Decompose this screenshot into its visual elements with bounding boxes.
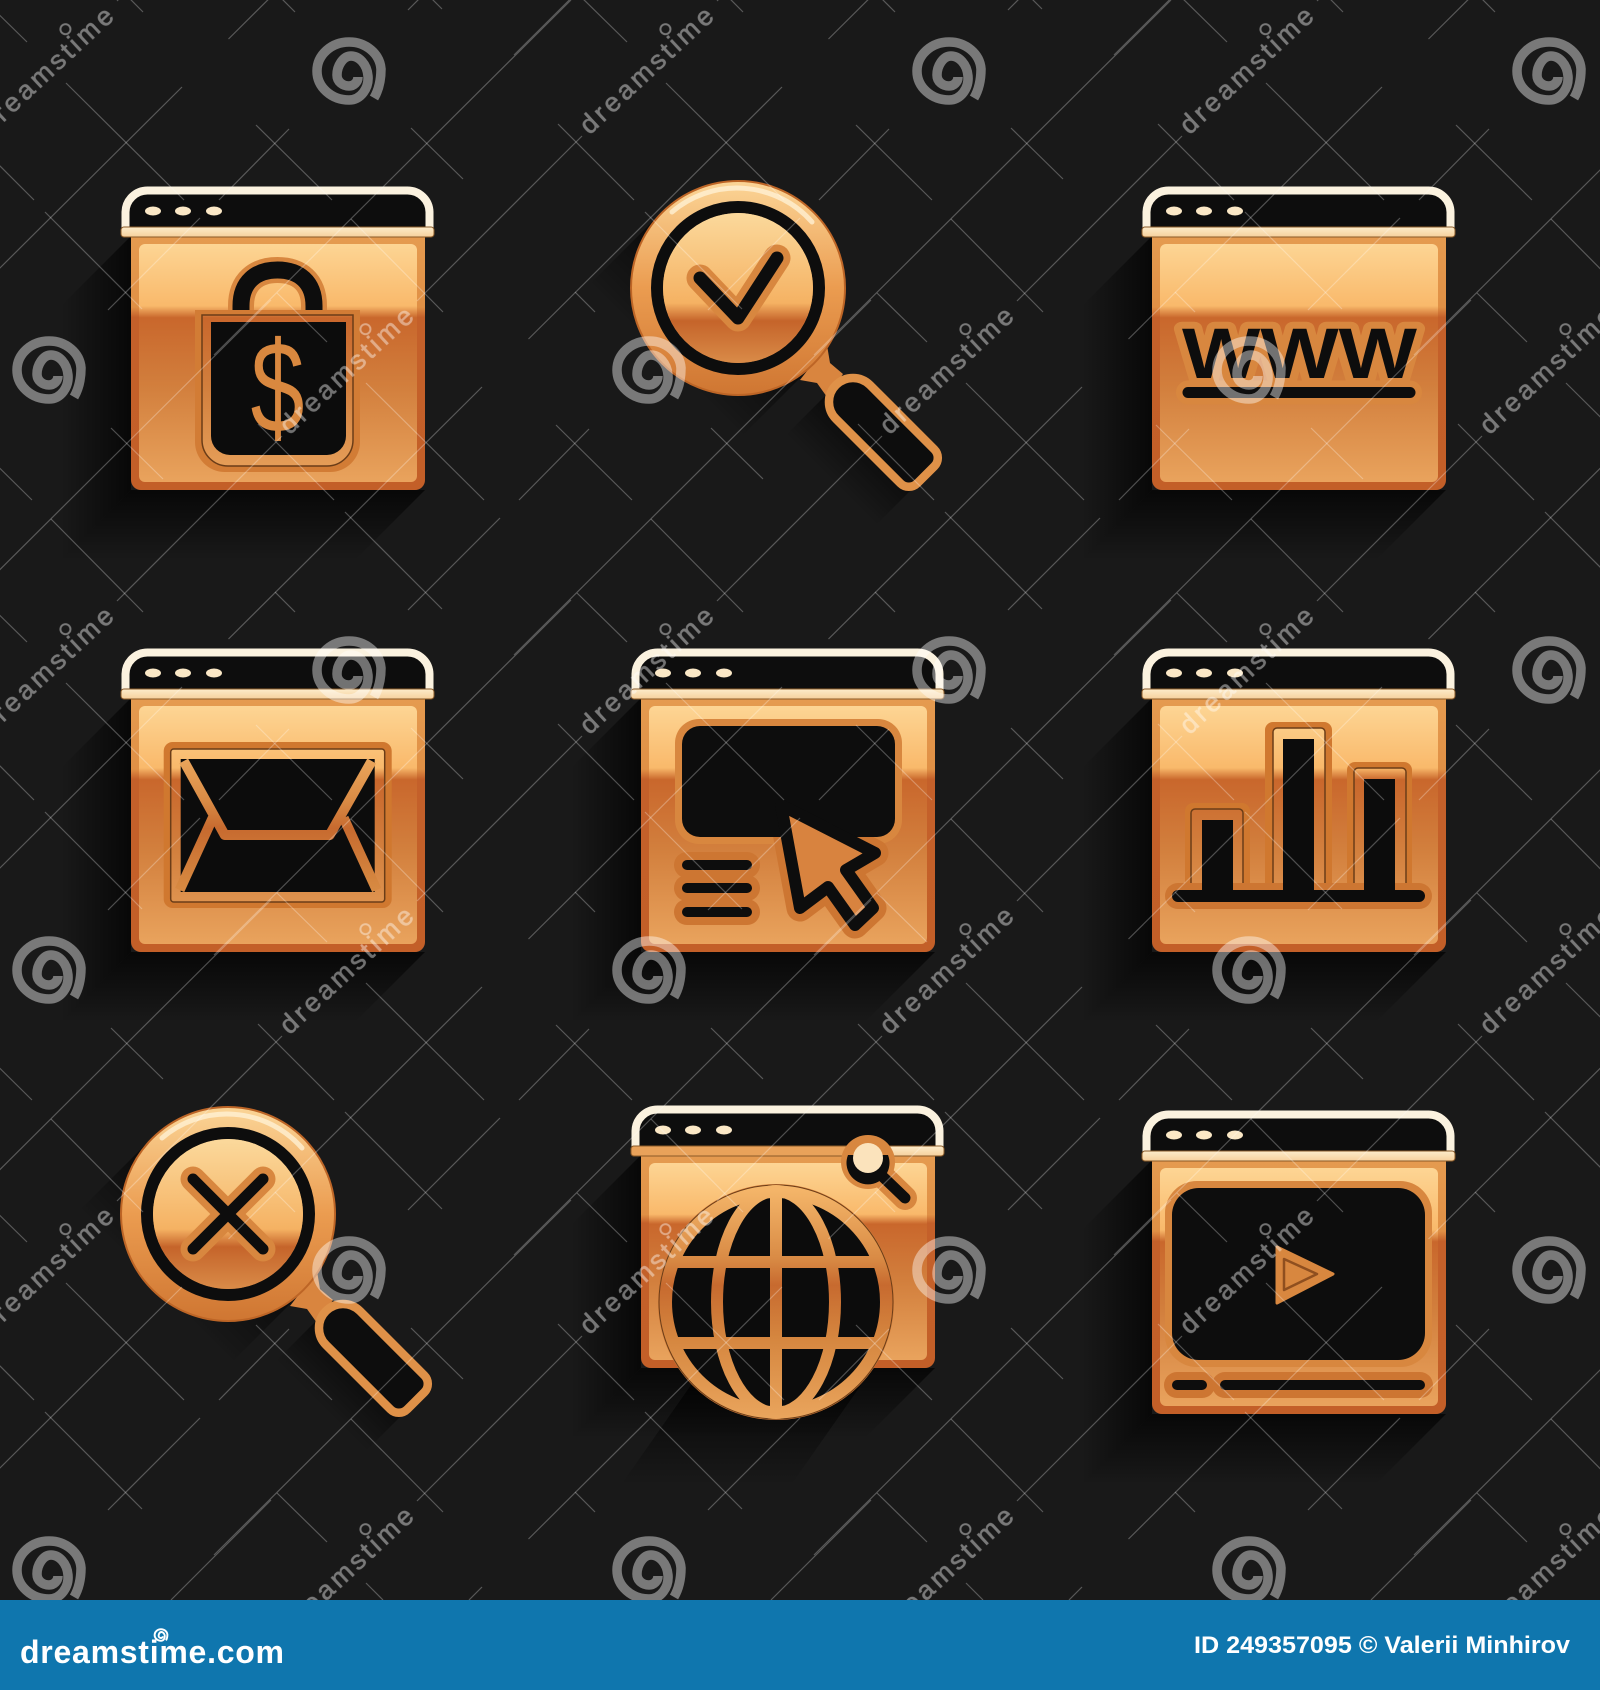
- check mark: [700, 258, 777, 318]
- watermark text: dreamstime: [873, 301, 1019, 440]
- icon: globe search window: [571, 1110, 944, 1485]
- icon: envelope window: [61, 652, 434, 1022]
- icon: bar chart window: [1082, 652, 1455, 1022]
- watermark text: dreamstime: [1173, 1, 1319, 140]
- window body: [641, 1155, 935, 1368]
- progress bars: [1177, 1372, 1420, 1398]
- text lines: [687, 865, 747, 912]
- footer logo: dreamstime.com: [20, 1634, 284, 1670]
- watermark text: dreamstime: [873, 901, 1019, 1040]
- bag body: [195, 310, 360, 472]
- watermark text: dreamstime: [1173, 1201, 1319, 1340]
- footer bar: [0, 1600, 1600, 1690]
- globe: [658, 1184, 894, 1420]
- screen halo: [675, 719, 902, 844]
- watermark text: dreamstime: [573, 1, 719, 140]
- watermark text: dreamstime: [1173, 601, 1319, 740]
- watermark text: dreamstime: [573, 601, 719, 740]
- www text: WWW: [1182, 315, 1417, 394]
- icon: click cursor window: [571, 652, 944, 1022]
- screen: [682, 726, 895, 837]
- cursor arrow: [781, 805, 875, 925]
- icon: www window: [1082, 190, 1455, 560]
- watermark text: dreamstime: [273, 1501, 419, 1640]
- watermark text: dreamstime: [873, 1501, 1019, 1640]
- dollar sign: $: [251, 315, 304, 460]
- envelope flap and folds: [180, 761, 377, 890]
- small search icon: [841, 1135, 905, 1198]
- cross mark: [193, 1179, 263, 1249]
- video screen: [1165, 1181, 1432, 1367]
- watermark text: dreamstime: [273, 901, 419, 1040]
- bar chart: [1178, 722, 1419, 898]
- watermark text: dreamstime: [573, 1201, 719, 1340]
- cursor halo: [781, 805, 875, 925]
- envelope frame: [164, 742, 392, 908]
- image credit: ID 249357095 © Valerii Minhirov: [1194, 1632, 1571, 1659]
- bag handle: [241, 270, 314, 316]
- icon: magnifier with cross: [82, 1107, 433, 1451]
- icon: magnifier with check mark: [592, 181, 943, 525]
- play button: [1277, 1247, 1333, 1303]
- icon: video player window: [1082, 1114, 1455, 1484]
- watermark text: dreamstime: [273, 301, 419, 440]
- icon: shopping bag window: [61, 190, 434, 560]
- underline: [1188, 380, 1410, 404]
